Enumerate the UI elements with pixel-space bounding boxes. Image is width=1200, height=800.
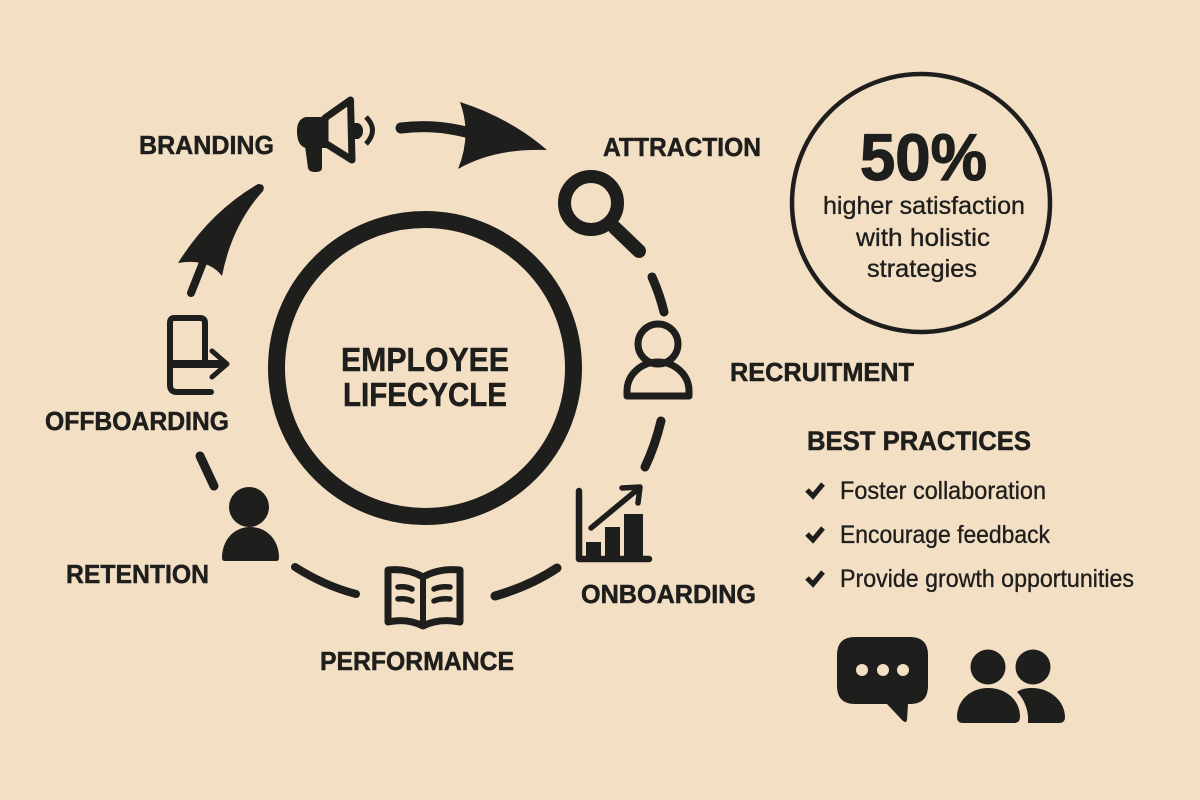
arc dash: recruitment to onboarding (645, 421, 661, 467)
label: attraction: ATTRACTION (603, 132, 761, 162)
icon: growth chart (579, 487, 649, 559)
central ring: employee lifecycle (276, 220, 574, 516)
arc dash: retention to offboarding (200, 456, 214, 486)
check item: foster collaboration: Foster collaboration (840, 477, 1046, 505)
central ring: employee lifecycle: LIFECYCLE (343, 376, 507, 413)
arrow: offboarding to branding (178, 184, 264, 293)
list: best practices (807, 477, 1134, 593)
label: branding: BRANDING (139, 130, 274, 160)
label: retention: RETENTION (66, 559, 209, 589)
label: onboarding: ONBOARDING (581, 579, 756, 609)
icon: chat bubble (837, 637, 928, 722)
arc dash: performance to retention (295, 567, 356, 594)
label: recruitment: RECRUITMENT (730, 357, 914, 387)
icon: magnifying glass (564, 176, 639, 251)
arc dash: attraction to recruitment (652, 277, 664, 312)
stat circle: 50 percent: 50% (860, 120, 987, 194)
icon: megaphone (297, 100, 372, 172)
stat circle: 50 percent: with holistic (855, 224, 990, 252)
icon: open book (388, 570, 460, 626)
stat circle: 50 percent: strategies (867, 255, 977, 283)
icon: offboarding exit (170, 318, 227, 392)
stat circle: 50 percent (792, 74, 1050, 332)
label: offboarding: OFFBOARDING (45, 406, 229, 436)
icon: retention person (222, 487, 279, 561)
label: performance: PERFORMANCE (320, 646, 514, 676)
heading: best practices: BEST PRACTICES (807, 426, 1031, 456)
stat circle: 50 percent: higher satisfaction (823, 192, 1025, 220)
icon: recruitment person (627, 324, 689, 396)
arc dash: onboarding to performance (495, 568, 557, 596)
arrow: branding to attraction (401, 102, 547, 169)
central ring: employee lifecycle: EMPLOYEE (341, 341, 509, 378)
check item: provide growth opportunities: Provide growth opportunities (840, 565, 1134, 593)
check item: encourage feedback: Encourage feedback (840, 521, 1050, 549)
icon: two people (957, 650, 1065, 723)
